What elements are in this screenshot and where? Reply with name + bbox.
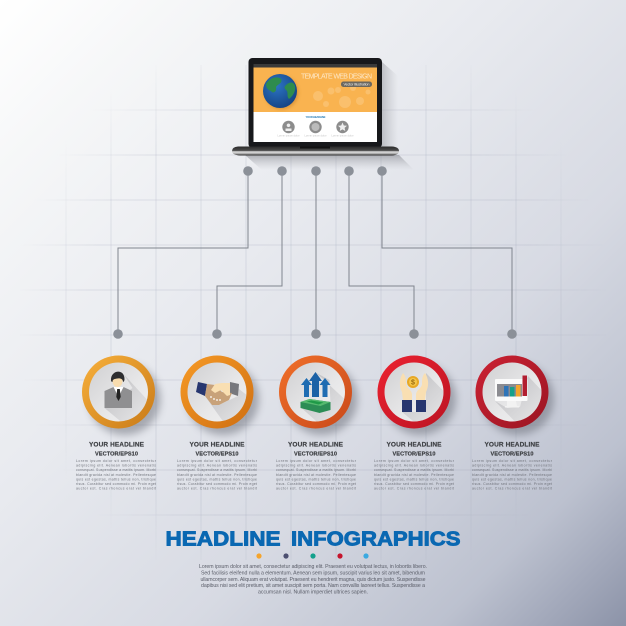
- icon: businessman: [104, 372, 132, 408]
- column 5 body: consequat. Suspendisse a mattis ipsum. Morbi: [472, 468, 552, 472]
- icon: hands with coin: $: [411, 380, 415, 386]
- badge: monitor chart: [476, 356, 557, 435]
- column 2 subheading: VECTOR/EPS10: [196, 451, 238, 457]
- column 4 heading: YOUR HEADLINE: [386, 442, 442, 449]
- intro paragraph: dapibus nisi sed elit pretium, sit amet suscipit sem porta. Nam convallis laoreet tellus. Suspendisse a: [201, 583, 425, 589]
- screen icon labels: Lorem ipsum dolor: [332, 134, 354, 138]
- laptop base notch: [300, 146, 330, 148]
- screen icon labels: Lorem ipsum dolor: [304, 134, 327, 138]
- intro paragraph: ullamcorper sem. Aliquam erat volutpat. Praesent eu hendrerit magna, quis dictum justo. Suspendisse: [200, 577, 426, 583]
- panel heading: YOUR HEADLINE: [306, 115, 326, 119]
- column 1 body: adipiscing elit. Aenean lobortis venenatis: [76, 464, 156, 468]
- column 3 text: [276, 442, 357, 491]
- background grid: [50, 65, 562, 560]
- column 3 heading: YOUR HEADLINE: [288, 442, 344, 449]
- column 1 body: blandit gravida nisl at molestie. Pellentesque: [76, 473, 156, 477]
- column 5 heading: YOUR HEADLINE: [484, 442, 540, 449]
- column 3 body: blandit gravida nisl at molestie. Pellentesque: [276, 473, 356, 477]
- laptop base: [232, 146, 399, 156]
- column 2 body: blandit gravida nisl at molestie. Pellentesque: [177, 473, 257, 477]
- column 5 body: Lorem ipsum dolor sit amet, consectetur: [472, 459, 553, 463]
- column 1 body: Lorem ipsum dolor sit amet, consectetur: [76, 459, 157, 463]
- column 5 subheading: VECTOR/EPS10: [490, 451, 534, 457]
- column 4 body: risus. Curabitur sed commodo mi. Proin eget: [374, 482, 454, 486]
- column 4 body: consequat. Suspendisse a mattis ipsum. Morbi: [374, 468, 454, 472]
- column 5 body: quis est egestas, mattis tellus non, tristique: [472, 477, 552, 481]
- badge: coin in hands: [378, 356, 459, 435]
- laptop base shadow: [245, 155, 414, 170]
- column 4 body: adipiscing elit. Aenean lobortis venenatis: [374, 464, 454, 468]
- column 5 body: auctor est. Cras rhoncus erat vel blandit: [472, 487, 552, 491]
- column 4 body: Lorem ipsum dolor sit amet, consectetur: [374, 459, 455, 463]
- column 1 body: auctor est. Cras rhoncus erat vel blandit: [76, 487, 156, 491]
- column 1 body: consequat. Suspendisse a mattis ipsum. Morbi: [76, 468, 156, 472]
- column 4 subheading: VECTOR/EPS10: [392, 451, 436, 457]
- laptop shadow: [382, 62, 398, 148]
- column 1 subheading: VECTOR/EPS10: [95, 451, 138, 457]
- screen icons: [282, 121, 349, 133]
- main title: INFOGRAPHICS: [291, 528, 460, 550]
- column 3 body: Lorem ipsum dolor sit amet, consectetur: [276, 459, 357, 463]
- intro paragraph: Sed facilisis eleifend nulla a elementum. Aenean sem ipsum, suscipit varius leo sit amet, bibendum: [201, 570, 425, 576]
- long shadow: [207, 389, 246, 421]
- column 1 body: risus. Curabitur sed commodo mi. Proin eget: [76, 482, 156, 486]
- column 2 body: Lorem ipsum dolor sit amet, consectetur: [177, 459, 258, 463]
- intro paragraph: accumsan nisl. Nullam imperdiet ultrices sapien.: [258, 590, 368, 596]
- badge: person: [82, 356, 160, 435]
- badge: money growth: [279, 356, 360, 435]
- column 2 body: adipiscing elit. Aenean lobortis venenatis: [177, 464, 257, 468]
- column 5 body: risus. Curabitur sed commodo mi. Proin eget: [472, 482, 552, 486]
- column 5 text: [472, 442, 553, 491]
- column 1 body: quis est egestas, mattis tellus non, tristique: [76, 477, 156, 481]
- main title: HEADLINE: [166, 528, 280, 550]
- icon: handshake: [196, 382, 239, 405]
- column 2 body: [177, 459, 258, 491]
- laptop lid: [248, 58, 382, 148]
- connector dots: [113, 166, 517, 339]
- column 2 heading: YOUR HEADLINE: [190, 442, 245, 449]
- column 1 text: [76, 442, 157, 491]
- column 3 subheading: VECTOR/EPS10: [294, 451, 337, 457]
- column 5 body: [472, 459, 553, 491]
- column 3 body: adipiscing elit. Aenean lobortis venenatis: [276, 464, 356, 468]
- connector lines: [118, 171, 512, 334]
- laptop: [232, 58, 414, 170]
- column 3 body: quis est egestas, mattis tellus non, tristique: [276, 477, 356, 481]
- icon: monitor with bars: [495, 376, 528, 408]
- column 4 body: quis est egestas, mattis tellus non, tristique: [374, 477, 454, 481]
- main title: [166, 528, 460, 550]
- column 5 body: adipiscing elit. Aenean lobortis venenatis: [472, 464, 552, 468]
- screen header bar: [254, 64, 377, 68]
- banner title: TEMPLATE WEB DESIGN: [301, 74, 372, 80]
- banner pill: [341, 82, 372, 87]
- column 3 body: [276, 459, 357, 491]
- column 2 body: quis est egestas, mattis tellus non, tristique: [177, 477, 257, 481]
- long shadow: [302, 374, 344, 422]
- screen banner: [254, 68, 377, 112]
- long shadow: [402, 373, 444, 422]
- column 2 body: consequat. Suspendisse a mattis ipsum. Morbi: [177, 468, 257, 472]
- screen icon labels: Lorem ipsum dolor: [278, 134, 300, 138]
- long shadow: [496, 376, 542, 422]
- column 4 body: [374, 459, 455, 491]
- intro paragraph: Lorem ipsum dolor sit amet, consectetur adipiscing elit. Praesent eu volutpat lectus, in lobortis libero.: [199, 564, 427, 570]
- screen content panel: [254, 112, 377, 142]
- column 1 heading: YOUR HEADLINE: [89, 442, 145, 449]
- column 4 text: [374, 442, 455, 491]
- column 2 body: auctor est. Cras rhoncus erat vel blandit: [177, 487, 257, 491]
- column 4 body: blandit gravida nisl at molestie. Pellentesque: [374, 473, 454, 477]
- column 2 body: risus. Curabitur sed commodo mi. Proin eget: [177, 482, 257, 486]
- column 2 text: [177, 442, 258, 491]
- column 3 body: consequat. Suspendisse a mattis ipsum. Morbi: [276, 468, 356, 472]
- title dots: [256, 553, 369, 559]
- column 4 body: auctor est. Cras rhoncus erat vel blandit: [374, 487, 454, 491]
- long shadow: [104, 374, 147, 422]
- intro paragraph: [199, 564, 427, 596]
- icon: globe: [263, 74, 298, 110]
- column 5 body: blandit gravida nisl at molestie. Pellentesque: [472, 473, 552, 477]
- banner pill: Vector Illustration: [344, 83, 370, 87]
- column 3 body: risus. Curabitur sed commodo mi. Proin eget: [276, 482, 356, 486]
- icon: arrows and banknotes: [300, 372, 330, 413]
- column 3 body: auctor est. Cras rhoncus erat vel blandit: [276, 487, 356, 491]
- badge: handshake: [180, 356, 262, 435]
- column 1 body: [76, 459, 157, 491]
- screen icon labels: [278, 134, 354, 138]
- banner bubbles: [313, 85, 370, 108]
